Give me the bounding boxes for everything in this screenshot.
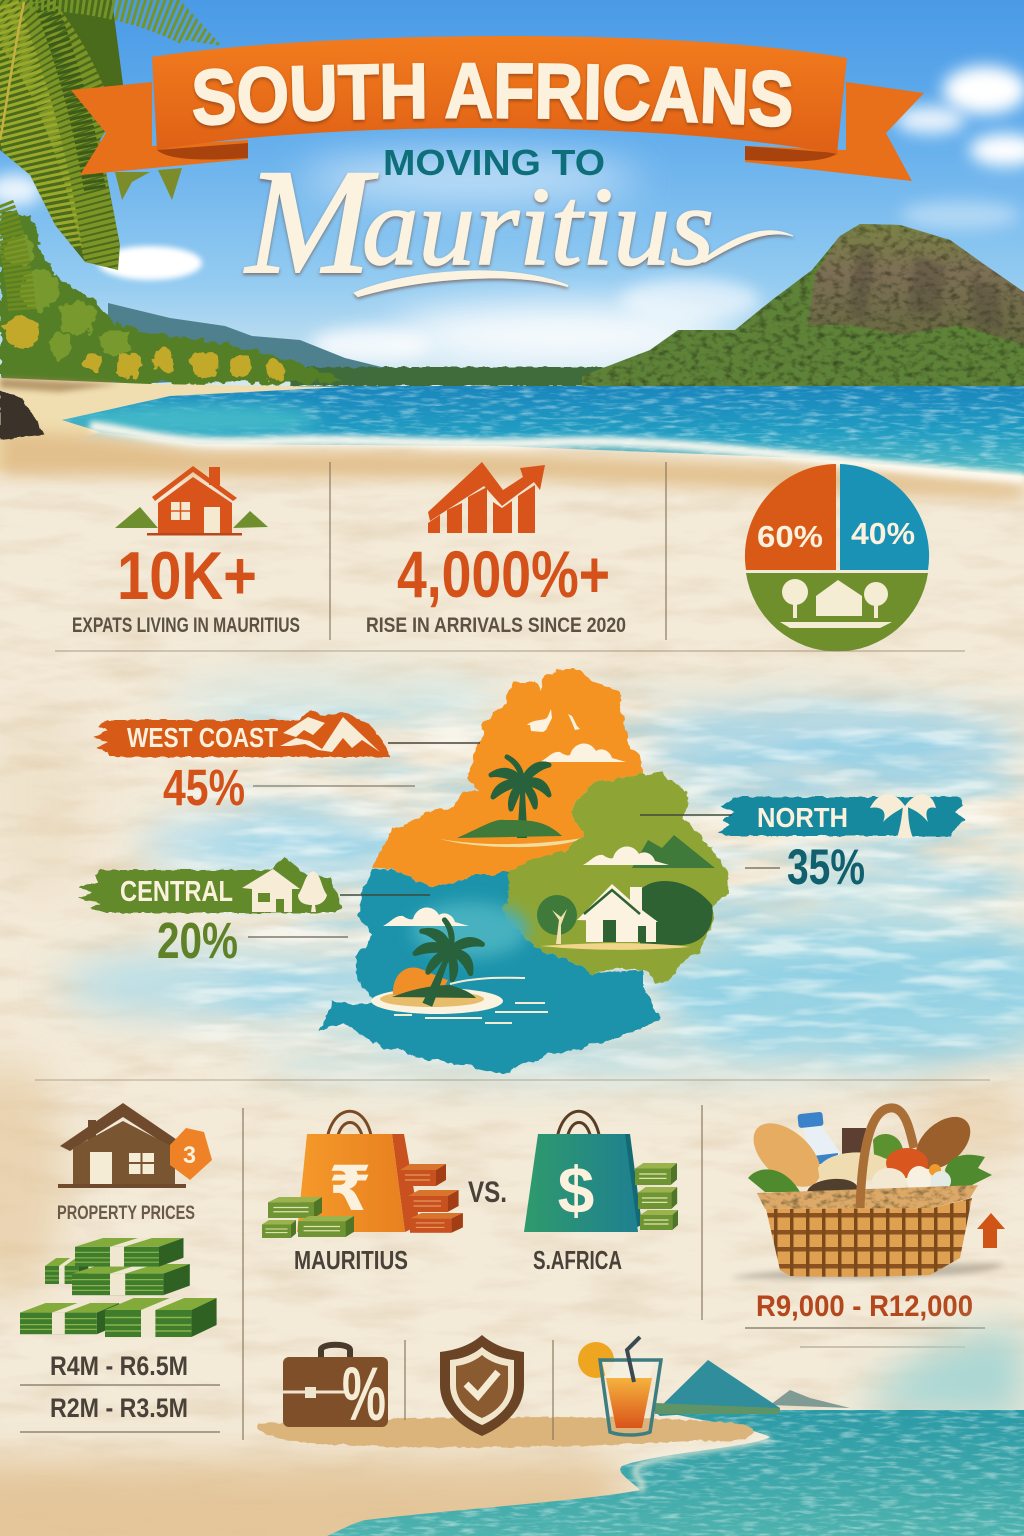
panel: grocery basket [730,1107,1005,1347]
price range low: R2M - R3.5M [50,1393,188,1423]
number 4,000%+: 4,000%+ [397,537,610,611]
sandwich [807,1179,857,1192]
basket handle [860,1108,914,1208]
divider [20,1384,220,1386]
green tree crowns [5,235,129,358]
icon: cloud [540,744,626,762]
panel: property prices [20,1103,220,1432]
script heading mauritius [244,139,793,305]
pie chart 60 / 40 [745,464,929,651]
label property prices: PROPERTY PRICES [57,1203,195,1224]
orange bush [393,967,448,995]
icon: mountains [280,717,380,752]
divider [745,1327,985,1329]
turquoise sea [327,1410,1024,1536]
icon: house with hills [115,466,268,536]
left leaves [748,1169,800,1192]
divider [242,1108,244,1440]
ribbon fold left [157,143,248,160]
mountain foot [655,1403,780,1414]
icon: palm tree leaning [397,914,485,1015]
icon: palm tree [491,757,549,838]
leader line [253,785,415,787]
eggs [872,1168,906,1194]
icon: lower cash stacks [20,1298,217,1337]
icon: brown house [58,1103,186,1188]
label mauritius: MAURITIUS [294,1245,408,1275]
wet sand [0,430,1024,500]
brush band [78,857,342,913]
icon: tropical drink [578,1337,661,1435]
white streaks [180,700,1024,1070]
icon: price tag badge [170,1128,212,1180]
water wash top [860,1325,1024,1420]
baguette [742,1111,832,1199]
leader line [388,742,480,744]
icon: palm [870,794,936,838]
soft blue pools [60,676,1024,1078]
icon: rising chart [428,462,545,533]
pie slice: blue 40% [840,464,929,570]
pie slice: green land [746,573,928,651]
yellow palm crowns [5,315,285,380]
key stats row [55,462,965,651]
brush band [93,710,390,757]
lighter water [412,902,528,958]
divider [329,462,331,640]
icon: green cash [262,1197,354,1238]
divider [665,462,667,640]
shoreline foam [90,426,1024,478]
chocolate [842,1128,866,1154]
lower left frond [0,205,22,310]
hero photo scene: beach and mountain [0,0,1024,500]
basket rim [757,1185,978,1209]
Le Morne mountain [582,224,1024,386]
icon: teal shopping bag: $ [558,1153,594,1227]
right leaves [945,1155,992,1190]
ribbon tail left [71,82,248,175]
icon: teal shopping bag [524,1111,642,1232]
turquoise shallows [60,404,320,436]
region name: WEST COAST [127,722,278,753]
label arrivals: RISE IN ARRIVALS SINCE 2020 [366,614,626,637]
basket shadow [730,1264,1005,1279]
divider [701,1105,703,1320]
island sand [371,988,503,1014]
divider [552,1340,554,1440]
icon: price tag badge: 3 [183,1142,196,1169]
ribbon tail right [745,82,924,181]
icon: cottage and tree [242,869,327,912]
label: west coast 45% [93,710,480,816]
text 40%: 40% [851,516,915,551]
region: teal central [320,868,660,1075]
distant mountain big [655,1360,780,1416]
pie slice: orange 60% [745,464,836,570]
icon: cloud [383,908,469,926]
label: central 20% [78,857,430,969]
basket body [766,1198,972,1277]
nuts [818,1152,888,1182]
beach debris [0,378,120,392]
percentage: 45% [163,759,245,816]
divider [800,1346,965,1348]
shore rocks [0,390,45,440]
icon: goats [527,709,580,732]
island sand inner [380,991,484,1007]
heading south africans: SOUTH AFRICANS [192,62,793,131]
ground strip [540,943,690,950]
divider [55,650,965,652]
stat: expats [72,466,300,637]
clouds [0,66,1024,365]
icon: orange shopping bag: ₹ [328,1152,372,1225]
tan sand patches [0,700,1024,1536]
ribbon main band [152,36,847,154]
icon: shield with check [440,1335,524,1436]
rock shading [848,245,1005,332]
icon: orange shopping bag [297,1111,420,1232]
leader line [640,814,732,816]
island ground [392,985,476,998]
sky [0,0,1024,390]
price range high: R4M - R6.5M [50,1351,188,1381]
right bread [906,1107,980,1179]
region: orange west coast [373,668,643,888]
divider [20,1431,220,1433]
far tree line [290,367,1024,386]
icon: briefcase with percent: % [342,1352,386,1437]
milk bottle [802,1125,840,1164]
palm tree fronds [0,0,226,310]
mid leaves [873,1134,903,1160]
divider [404,1340,406,1420]
icon: brick stacks [400,1164,463,1233]
sand strip [440,838,583,847]
label expats: EXPATS LIVING IN MAURITIUS [72,614,300,637]
grocery price: R9,000 - R12,000 [756,1290,973,1323]
hanging fronds under ribbon [115,168,182,200]
wet sand strip [258,1417,754,1447]
percentage: 20% [157,912,238,969]
arrow: prices rising [977,1213,1005,1248]
percentage: 35% [787,839,865,895]
foam line [635,1438,770,1492]
script heading mauritius: M [244,139,378,305]
main crown [0,0,226,270]
leader line [340,894,430,896]
divider [35,1079,990,1081]
left beach [0,378,345,470]
icon: grocery food [742,1107,992,1199]
number 10K+: 10K+ [117,538,257,614]
watercolour sea wash behind map [60,676,1024,1078]
brush band [718,797,965,836]
rock face [808,224,1024,345]
stat: arrivals [366,462,626,637]
label: north 35% [640,794,965,895]
label south africa: S.AFRICA [533,1245,622,1275]
dark forest [640,881,713,945]
ribbon fold right [745,146,838,161]
icon: mountains [632,835,715,868]
island map of Mauritius [320,668,728,1075]
region: green north [502,773,728,983]
icon: cloud [583,847,669,865]
icon: briefcase with percent [283,1345,388,1437]
icon: upper cash stacks [45,1238,190,1295]
icon: green cash [635,1163,678,1230]
leader line [248,936,348,938]
text 60%: 60% [757,519,823,554]
distant left mountains [108,303,402,385]
icon: cottage and trees [780,579,892,628]
island mound [457,820,562,838]
tomato [886,1148,928,1178]
mountain base [582,224,1024,386]
icon: house [577,884,658,942]
bottom sea scene [258,1325,1024,1536]
sea [40,386,1024,476]
script heading mauritius: auritius [362,165,714,289]
blue streaks [230,710,1024,1050]
region name: NORTH [757,802,848,833]
subheading moving to: MOVING TO [383,142,605,183]
left jungle [0,210,345,385]
wave marks [394,978,548,1023]
leader line [745,867,780,869]
panel: cost comparison [262,1111,678,1275]
icon: tree [537,895,577,944]
region name: CENTRAL [120,876,233,908]
jungle mass [0,210,345,385]
title banner [71,36,924,181]
distant mountain small [770,1390,850,1408]
vs label: VS. [468,1176,507,1209]
